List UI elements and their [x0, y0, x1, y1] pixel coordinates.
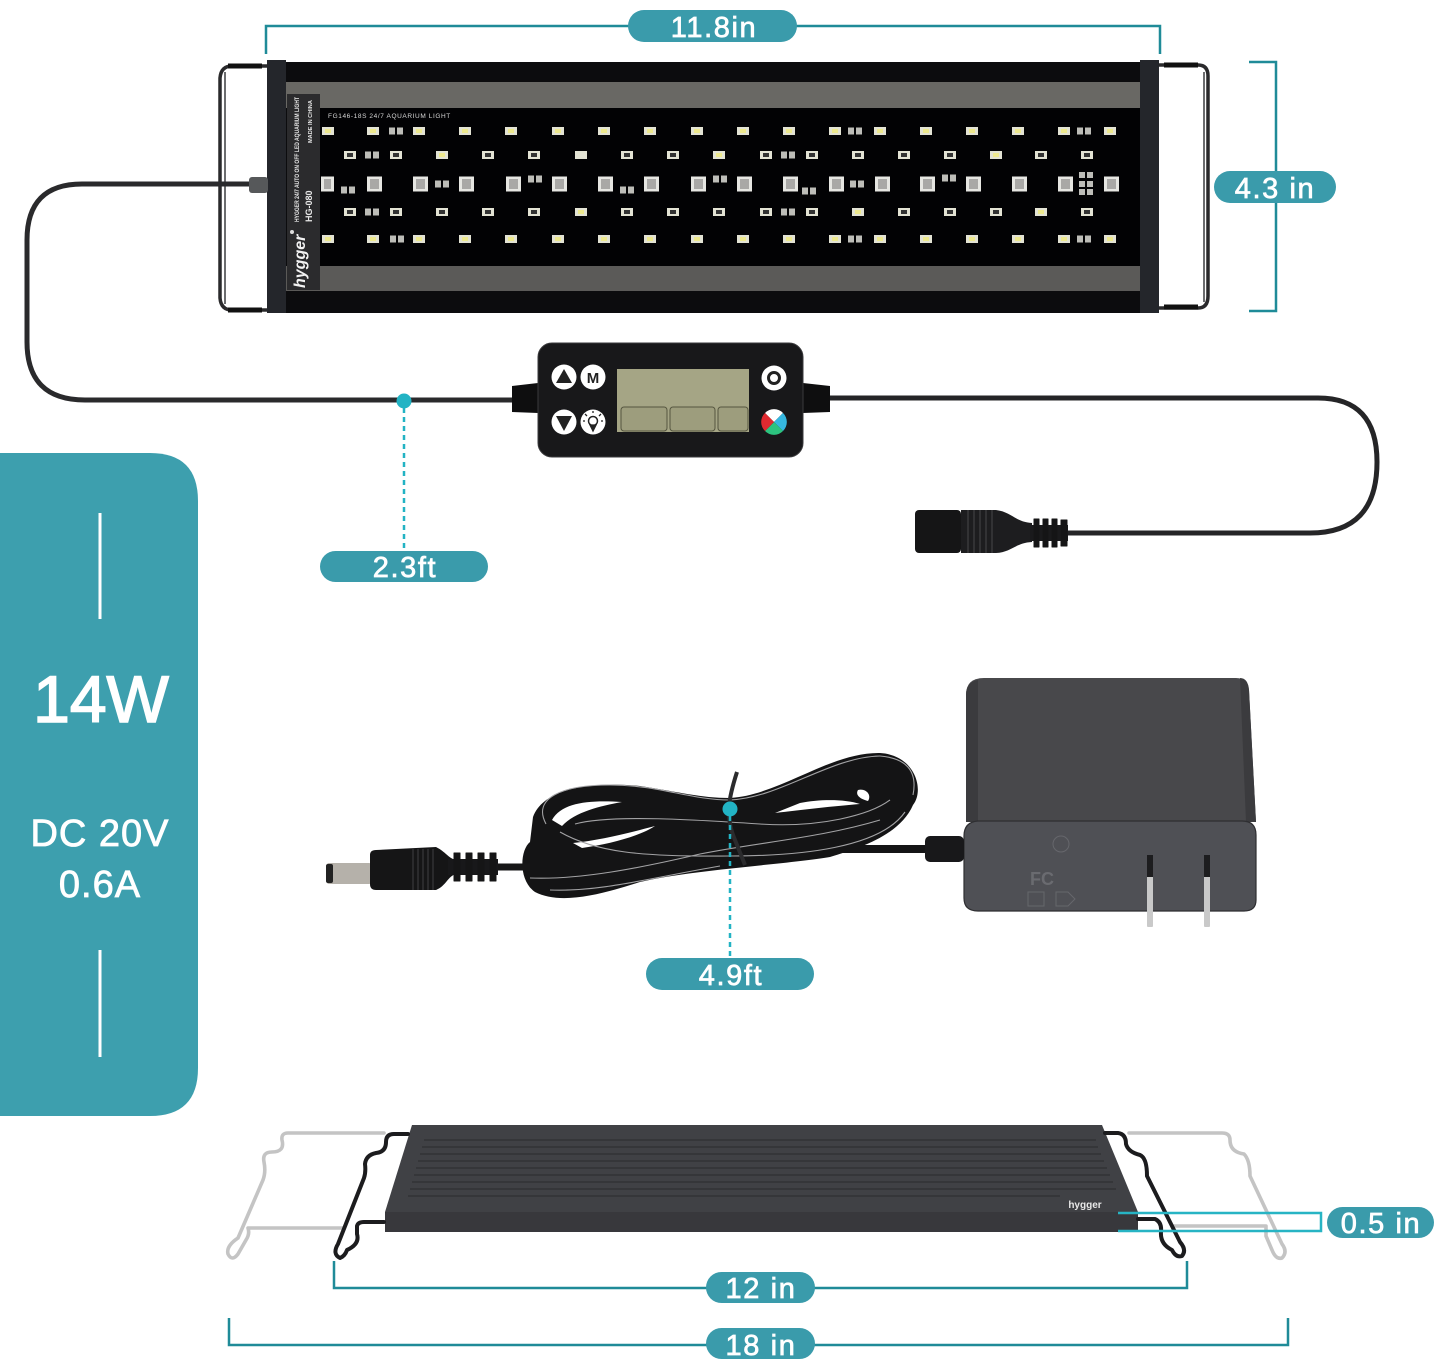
cable strain relief right — [803, 383, 830, 413]
dimension: light width 11.8in: 11.8in — [671, 12, 757, 44]
barrel plug — [326, 847, 530, 890]
LED board — [320, 108, 1140, 266]
panel: power specs — [0, 453, 198, 1116]
tray-side view of light — [385, 1125, 1138, 1232]
adapter cord coil and barrel plug — [326, 753, 925, 898]
left mounting bracket — [220, 66, 268, 310]
voltage and current: DC 20V — [30, 813, 170, 855]
dimension: 12 in: 12 in — [726, 1273, 796, 1305]
LED phosphor centres — [325, 131, 1113, 239]
brand label strip — [287, 94, 320, 290]
brand label strip: HG-080 — [304, 190, 314, 222]
LED light fixture — [220, 60, 1208, 313]
light top surface — [385, 1125, 1138, 1212]
right mounting bracket — [1158, 65, 1208, 308]
DC socket connector — [915, 510, 1068, 553]
LED controller — [512, 343, 830, 457]
brand label strip: MADE IN CHINA — [308, 100, 314, 143]
voltage and current: 0.6A — [59, 864, 141, 906]
light cable to controller — [27, 177, 512, 400]
cable tie — [729, 772, 745, 865]
cable grommet — [249, 177, 268, 193]
dimension: light depth 4.3 in: 4.3 in — [1235, 173, 1315, 205]
logo: hygger — [1068, 1200, 1102, 1211]
certification marks: FC — [1030, 869, 1054, 889]
callout: thickness 0.5 in: 0.5 in — [1341, 1208, 1421, 1240]
brand label strip: HYGGER 24/7 AUTO ON OFF LED AQUARIUM LIGHT — [294, 97, 301, 222]
callout: cable length 2.3ft — [320, 394, 488, 584]
upper divider — [98, 513, 102, 619]
callout: cord length 4.9ft: 4.9ft — [699, 960, 763, 992]
button: mode — [580, 364, 606, 390]
right end cap — [1140, 60, 1159, 313]
power adapter — [925, 678, 1256, 927]
callout: thickness 0.5 in — [1118, 1207, 1434, 1240]
button: down — [552, 410, 576, 434]
button: mode: M — [587, 370, 599, 387]
left end cap — [267, 60, 286, 313]
plug prongs — [1147, 855, 1210, 927]
dimension: 18 in — [229, 1318, 1288, 1362]
mounting wires — [335, 1133, 1184, 1258]
white LEDs — [322, 131, 1116, 239]
dimension: light depth 4.3 in — [1214, 62, 1336, 311]
ghost extended brackets — [228, 1133, 1285, 1258]
callout: cable length 2.3ft: 2.3ft — [373, 552, 437, 584]
fixture body — [268, 62, 1158, 313]
RGB LEDs — [321, 176, 1119, 192]
small SMD parts — [341, 131, 1091, 239]
button: light bulb — [580, 410, 606, 434]
dimension: light width 11.8in — [266, 10, 1160, 54]
brand label strip: hygger — [292, 234, 309, 288]
light front face — [385, 1212, 1138, 1232]
certification marks — [1028, 836, 1075, 906]
upper gray strip — [286, 82, 1141, 108]
cable to DC socket — [830, 398, 1377, 553]
callout: cord length 4.9ft — [646, 802, 814, 992]
button: power — [762, 366, 786, 390]
adapter body shading — [966, 678, 1256, 822]
heat sink ridges — [408, 1140, 1116, 1196]
button: up — [552, 364, 576, 390]
cable strain relief left — [512, 383, 538, 413]
dimension: 12 in — [334, 1261, 1187, 1305]
cord bundle — [522, 753, 925, 898]
lower gray strip — [286, 266, 1141, 291]
adapter strain relief — [925, 836, 964, 862]
wattage: 14W — [33, 662, 170, 736]
model text on board: FG146-18S 24/7 AQUARIUM LIGHT — [328, 113, 451, 120]
lower divider — [98, 950, 102, 1057]
dimension: 18 in: 18 in — [726, 1330, 796, 1362]
adapter plug face — [964, 821, 1256, 911]
controller housing — [538, 343, 803, 457]
LCD screen — [617, 369, 749, 432]
adapter body — [966, 678, 1256, 822]
button: colour — [761, 409, 787, 435]
